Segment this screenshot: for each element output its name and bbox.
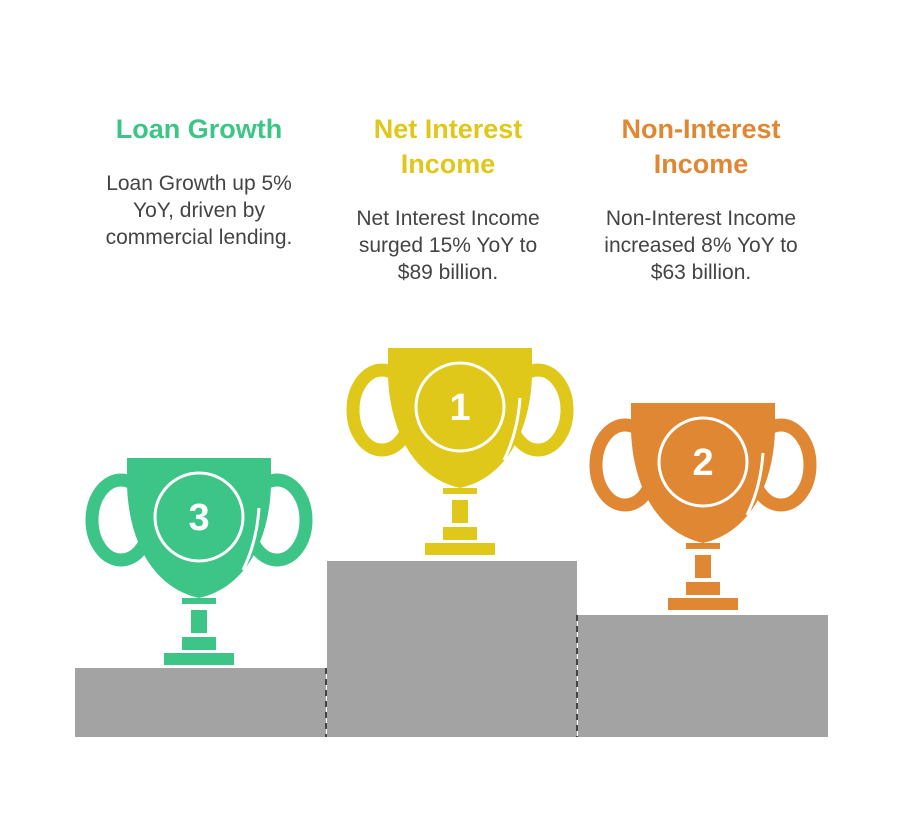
text: non-interest income: Non-Interest Income bbox=[606, 207, 796, 230]
icon: trophy 2: 2 bbox=[692, 442, 714, 484]
text: non-interest income: Income bbox=[654, 149, 748, 179]
text: loan growth bbox=[106, 114, 292, 249]
text: loan growth: YoY, driven by bbox=[133, 199, 265, 222]
text: net interest income: surged 15% YoY to bbox=[359, 234, 537, 257]
text: non-interest income: $63 billion. bbox=[651, 261, 751, 284]
text: non-interest income bbox=[604, 114, 798, 284]
text: net interest income: Net Interest bbox=[374, 114, 522, 144]
icon: trophy 3: 3 bbox=[188, 497, 210, 539]
text: net interest income: $89 billion. bbox=[398, 261, 498, 284]
icon: trophy 3 bbox=[92, 458, 306, 665]
icon: trophy 1: 1 bbox=[449, 387, 471, 429]
text: net interest income: Net Interest Income bbox=[356, 207, 540, 230]
icon: trophy 1 bbox=[353, 348, 567, 555]
icon: trophy 2 bbox=[596, 403, 810, 610]
text: non-interest income: Non-Interest bbox=[621, 114, 781, 144]
podium: 2nd bbox=[578, 615, 828, 737]
text: net interest income: Income bbox=[401, 149, 495, 179]
podium: 3rd bbox=[75, 668, 326, 737]
text: loan growth: commercial lending. bbox=[106, 226, 292, 249]
text: loan growth: Loan Growth up 5% bbox=[106, 172, 292, 195]
text: non-interest income: increased 8% YoY to bbox=[604, 234, 798, 257]
podium: 1st bbox=[327, 561, 577, 737]
text: net interest income bbox=[356, 114, 540, 284]
text: loan growth: Loan Growth bbox=[116, 114, 282, 144]
